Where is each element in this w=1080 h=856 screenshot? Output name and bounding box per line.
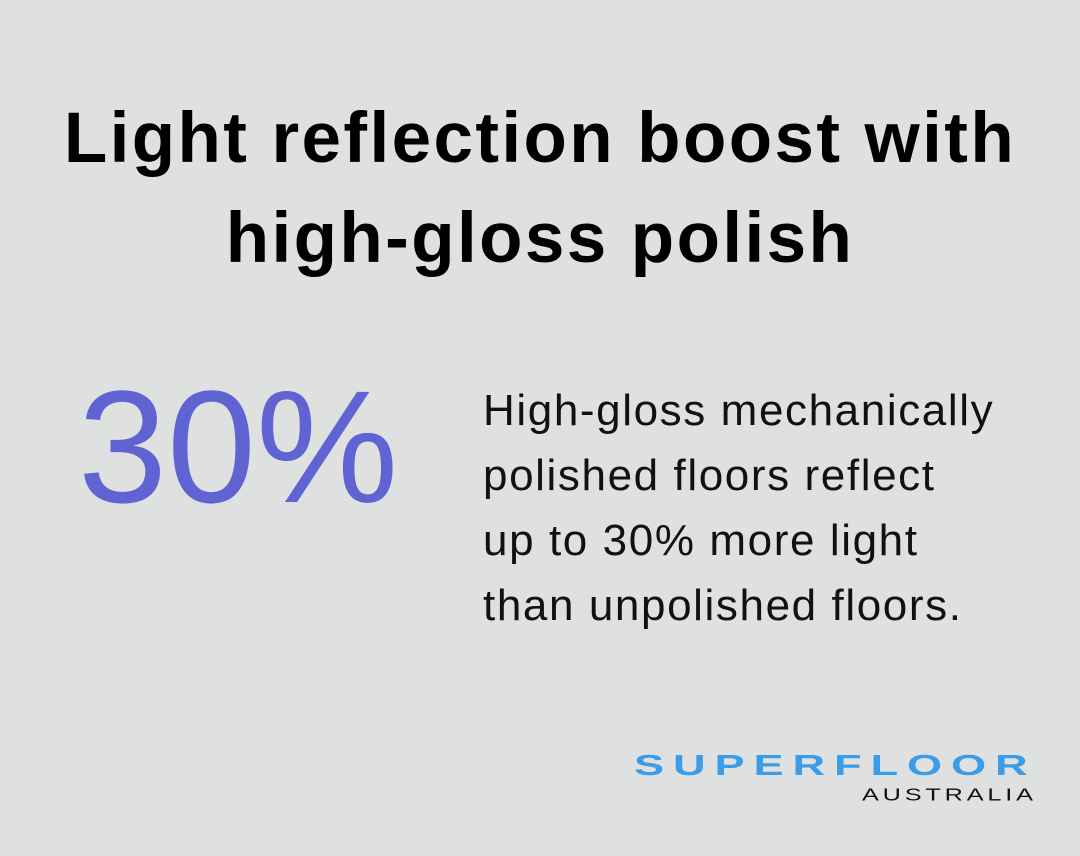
title: Light reflection boost with (64, 99, 1016, 178)
logo (634, 749, 1037, 804)
logo text: australia: AUSTRALIA (862, 784, 1037, 804)
description text (483, 386, 994, 630)
description text: than unpolished floors. (483, 581, 963, 630)
description text: polished floors reflect (483, 451, 936, 500)
logo text: superfloor: SUPERFLOOR (634, 749, 1037, 781)
description text: up to 30% more light (483, 516, 919, 565)
title (64, 99, 1016, 278)
description text: High-gloss mechanically (483, 386, 994, 435)
title: high-gloss polish (226, 199, 854, 278)
stat number: 30% (78, 357, 398, 536)
